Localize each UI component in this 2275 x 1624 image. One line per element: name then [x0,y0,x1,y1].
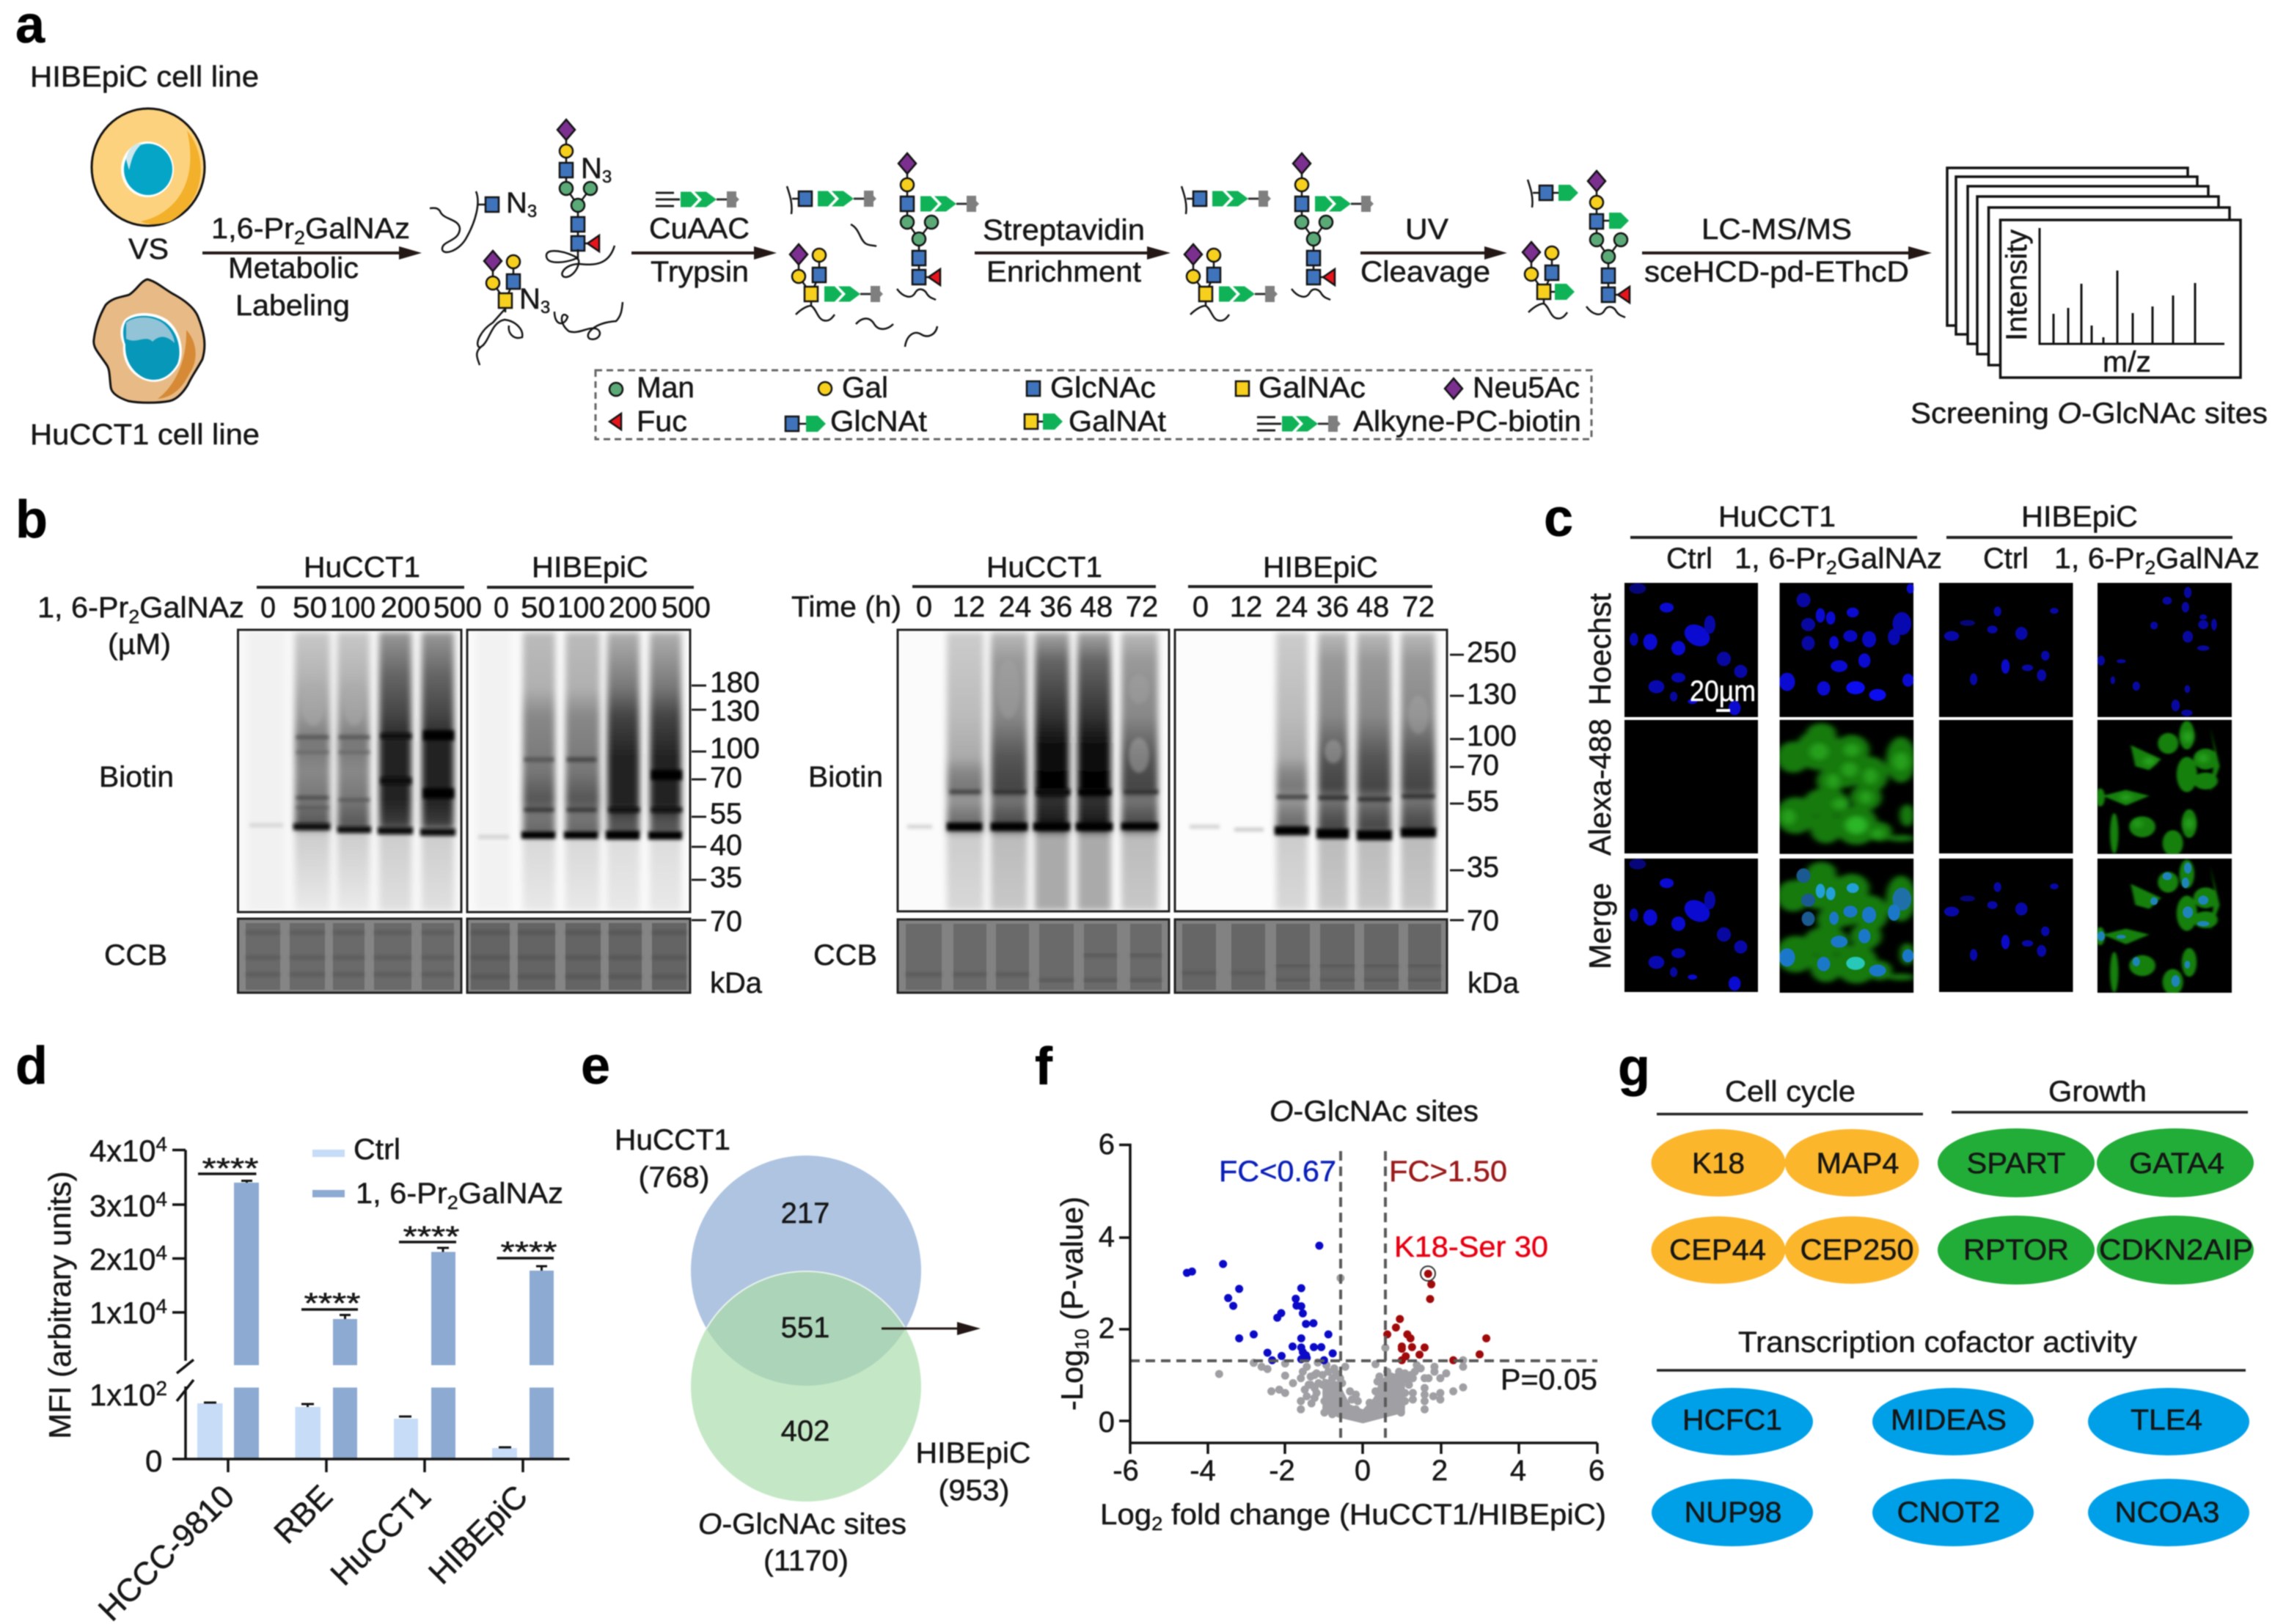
blot: HIBEpiC time biotin [1175,630,1447,911]
dose series header: HuCCT1 [304,551,420,584]
x tick labels: -6 [1113,1455,1139,1487]
molecular weight markers, time: 250 [1467,636,1517,669]
x tick labels: -2 [1269,1455,1295,1487]
labeled proteins with azide glycans: 3 [541,298,550,317]
label: VS: VS [128,233,169,265]
legend: glycan symbols: Neu5Ac [1473,372,1580,404]
panel g: protein categories [1618,1038,2254,1546]
significance brackets [198,1153,557,1320]
blot: HIBEpiC dose CCB [467,919,690,993]
icon: HuCCT1 cell [94,279,205,403]
dose series header: 50 [521,592,555,624]
y tick labels: 2 [1099,1312,1115,1345]
significance brackets: **** [403,1221,459,1253]
time series header [791,551,1435,623]
molecular weight markers, time: 55 [1467,785,1499,817]
y axis tick labels [89,1133,167,1478]
label: Streptavidin: Streptavidin [983,214,1145,246]
label: HuCCT1 cell line: HuCCT1 cell line [30,419,260,451]
legend: glycan symbols: Fuc [637,405,687,438]
scale bar: 20 µm: 20µm [1690,675,1756,708]
time series header: 48 [1357,591,1389,623]
row labels: Hoechst [1583,593,1617,705]
labeled proteins with azide glycans: 3 [527,202,537,221]
group: growth: RPTOR [1963,1234,2069,1266]
time series header: HuCCT1 [986,551,1102,584]
y axis tick labels: 3x10 [89,1188,156,1223]
y axis tick labels: 4x10 [89,1134,156,1168]
time series header: 0 [916,591,932,623]
highlighted point: K18-Ser 30 [1421,1266,1435,1281]
dose series header [37,551,711,661]
molecular weight markers, dose: 55 [710,798,742,830]
blot: HuCCT1 dose CCB [238,919,461,993]
group: transcription cofactor activity: Transcription cofactor activity [1738,1326,2137,1359]
time series header: 72 [1402,591,1435,623]
label: 1,6-Pr2GalNAz: 2 [294,227,305,249]
annotation: P=0.05: P=0.05 [1501,1364,1597,1396]
time series header: 0 [1193,591,1209,623]
group: transcription cofactor activity: TLE4 [2131,1404,2202,1436]
dose series header: 200 [381,592,431,624]
x axis labels: HIBEpiC [422,1478,535,1591]
dose series header: (µM) [108,628,171,661]
legend: glycan symbols: Gal [842,372,888,404]
group: cell cycle: K18 [1692,1147,1745,1180]
x axis labels [92,1478,535,1624]
arrow: UV cleavage [1360,246,1507,260]
molecular weight markers, dose: 35 [710,861,742,894]
group: cell cycle: CEP44 [1669,1234,1766,1266]
labeled proteins with azide glycans: 3 [602,167,612,187]
label: Screening O-GlcNAc sites: Screening O-GlcNAc sites [1911,397,2268,430]
legend: 2 [447,1191,458,1213]
arrow: metabolic labeling [202,246,422,260]
time series header: 48 [1080,591,1113,623]
molecular weight markers, time: 70 [1467,749,1499,782]
glycopeptides after CuAAC [787,153,979,347]
y tick labels [1099,1128,1115,1439]
x tick labels: 0 [1355,1455,1371,1487]
label: HuCCT1 (768) [615,1124,730,1194]
blot: HIBEpiC dose biotin [467,630,690,912]
dose series header: 0 [494,592,509,624]
group: transcription cofactor activity: NUP98 [1684,1496,1782,1529]
label: HIBEpiC (953): HIBEpiC [915,1437,1031,1469]
label: Labeling: Labeling [235,290,350,322]
label: HIBEpiC (953): (953) [939,1474,1009,1507]
dose series header: 50 [293,592,327,624]
dose series header: 2 [128,606,139,628]
venn circles [691,1155,921,1502]
molecular weight markers, time: kDa [1468,967,1520,999]
label: Metabolic: Metabolic [228,252,359,284]
panel c: fluorescence microscopy [1544,489,2260,995]
annotation: FC<0.67: FC<0.67 [1219,1155,1336,1188]
panel b: western blots [15,490,1520,999]
x axis labels: HuCCT1 [323,1478,438,1592]
y axis tick labels: 1x10 [89,1378,156,1412]
legend: 1, 6-Pr [356,1177,444,1210]
x axis title: Log [1100,1499,1149,1531]
molecular weight markers, time: 70 [1467,905,1499,937]
icon: alkyne-PC-biotin reagent [656,191,739,207]
annotation: K18-Ser 30: K18-Ser 30 [1394,1231,1548,1263]
column headers: HIBEpiC [2021,501,2138,533]
dose series header: 100 [330,592,375,624]
axes [172,1150,569,1472]
time series header: HIBEpiC [1263,551,1378,584]
significance brackets: **** [304,1287,361,1320]
y axis tick labels: 4 [156,1188,167,1210]
y axis title: 10 [1071,1329,1093,1350]
time series header: Time (h) [791,591,901,623]
y axis tick labels: 4 [156,1133,167,1155]
column headers: 1, 6-Pr [2054,543,2142,575]
panel f: volcano plot [1035,1037,1606,1535]
y axis title: -Log [1055,1349,1089,1411]
dose series header: 0 [260,592,276,624]
group: growth: Growth [2048,1076,2147,1108]
label: 1,6-Pr2GalNAz: 1,6-Pr [211,213,291,245]
column headers: 2 [2144,556,2155,578]
dose series header: GalNAz [139,592,244,624]
legend: glycan symbols: GlcNAt [830,405,927,438]
label: Trypsin: Trypsin [651,256,749,288]
dose series header: HIBEpiC [532,551,648,584]
molecular weight markers, time [1450,636,1520,999]
group: growth: SPART [1967,1147,2065,1180]
molecular weight markers, time: 35 [1467,851,1499,883]
panel letter b: b [15,490,48,549]
y axis tick labels: 0 [145,1444,162,1478]
threshold lines [1130,1151,1597,1443]
arrow: LC-MS/MS [1642,246,1932,260]
molecular weight markers, dose [692,666,763,999]
label: CCB: CCB [813,939,877,971]
label: Enrichment: Enrichment [986,256,1141,288]
label: O-GlcNAc sites (1170) [698,1508,906,1577]
blot: HIBEpiC time CCB [1175,919,1447,993]
group: cell cycle: Cell cycle [1725,1076,1855,1108]
panel letter e: e [581,1037,610,1095]
panel d: MFI bar chart [15,1037,569,1624]
microscopy image grid [1624,583,2232,995]
dose series header: 200 [609,592,657,624]
dose series header: 100 [557,592,605,624]
time series header: 24 [999,591,1031,623]
blot: HuCCT1 time biotin [898,630,1169,911]
y tick labels: 6 [1099,1128,1115,1161]
molecular weight markers, time: 100 [1467,720,1517,752]
arrow: streptavidin enrichment [975,246,1171,260]
value: 402: 402 [781,1415,829,1447]
group: cell cycle: CEP250 [1800,1234,1914,1266]
legend: glycan symbols: GalNAt [1069,405,1166,438]
time series header: 72 [1126,591,1158,623]
labeled proteins with azide glycans: N [519,283,541,315]
label: 1,6-Pr2GalNAz: GalNAz [305,213,410,245]
enriched glycopeptides [1182,153,1374,320]
y axis tick labels: 2 [156,1377,167,1400]
molecular weight markers, dose: 70 [710,905,742,938]
panel e: Venn diagram [581,1037,1031,1577]
x axis title: fold change (HuCCT1/HIBEpiC) [1162,1499,1606,1531]
panel letter g: g [1618,1038,1650,1097]
significance brackets: **** [500,1236,557,1268]
molecular weight markers, dose: 180 [710,666,760,699]
significance brackets: **** [202,1153,258,1185]
legend: Ctrl [353,1134,400,1166]
group: cell cycle: MAP4 [1816,1147,1900,1180]
stacked MS spectra [1947,168,2241,378]
plot title: O-GlcNAc sites [1270,1095,1479,1128]
value: 217: 217 [781,1197,829,1230]
time series header: 24 [1275,591,1308,623]
label: Biotin: Biotin [808,761,883,793]
label: HIBEpiC cell line: HIBEpiC cell line [30,61,259,93]
value: 551: 551 [781,1312,829,1344]
y axis title: (P-value) [1055,1197,1089,1329]
molecular weight markers, dose: 40 [710,829,742,861]
row labels: Alexa-488 [1583,719,1617,856]
molecular weight markers, dose: 70 [710,762,742,794]
legend [312,1134,563,1213]
legend: glycan symbols: Alkyne-PC-biotin [1353,405,1581,438]
panel letter f: f [1035,1037,1053,1096]
arrow to volcano plot [882,1322,981,1335]
group: transcription cofactor activity: CNOT2 [1897,1496,2001,1529]
data points [1187,1246,1487,1423]
legend: glycan symbols: Man [637,372,695,404]
time series header: 36 [1040,591,1072,623]
axes and ticks [1119,1145,1597,1454]
time series header: 12 [1230,591,1262,623]
x axis labels: HCCC-9810 [92,1478,241,1624]
panel a: labeling workflow [15,0,2268,451]
cleaved glycopeptides [1523,171,1630,318]
icon: HIBEpiC cell [92,109,205,226]
group: transcription cofactor activity [1652,1326,2249,1546]
bars and error bars [197,1180,554,1458]
annotation: FC>1.50: FC>1.50 [1389,1155,1507,1188]
labeled proteins with azide glycans [430,120,623,365]
x tick labels: 6 [1589,1455,1605,1487]
row labels [1583,593,1617,969]
label: Biotin: Biotin [99,761,174,793]
column headers [1630,501,2260,578]
group: growth: CDKN2AIP [2099,1234,2253,1266]
label: HIBEpiC (953) [915,1437,1031,1507]
panel letter d: d [15,1037,48,1095]
y axis tick labels: 4 [156,1295,167,1318]
y axis tick labels: 4 [156,1241,167,1264]
label: HuCCT1 (768): (768) [638,1161,710,1194]
dose series header: 500 [433,592,482,624]
dose series header: 500 [662,592,711,624]
label: m/z: m/z [2103,346,2151,378]
label: Intensity: Intensity [2001,229,2033,341]
arrow: CuAAC [631,246,777,260]
group: transcription cofactor activity: HCFC1 [1682,1404,1782,1436]
x tick labels: -4 [1190,1455,1216,1487]
blot: HuCCT1 time CCB [898,919,1169,993]
column headers: Ctrl [1983,543,2029,575]
labeled proteins with azide glycans: N [581,153,602,185]
label: CuAAC: CuAAC [649,213,750,245]
y axis tick labels: 1x10 [89,1296,156,1330]
panel letter c: c [1544,489,1573,548]
column headers: HuCCT1 [1718,501,1836,533]
labeled proteins with azide glycans: N [506,187,527,219]
y axis tick labels: 2x10 [89,1242,156,1276]
group: cell cycle [1652,1076,1923,1284]
label: sceHCD-pd-EThcD: sceHCD-pd-EThcD [1644,256,1909,288]
label: CCB: CCB [104,939,167,971]
blot: HuCCT1 dose biotin [238,630,461,912]
label: UV: UV [1405,213,1448,246]
x tick labels: 4 [1510,1455,1526,1487]
label: O-GlcNAc sites (1170): O-GlcNAc sites [698,1508,906,1540]
legend: glycan symbols [596,370,1591,439]
legend: glycan symbols: GlcNAc [1050,372,1156,404]
label: Cleavage: Cleavage [1360,256,1490,288]
time series header: 36 [1316,591,1349,623]
column headers: 2 [1826,556,1837,578]
molecular weight markers, time: 130 [1467,678,1517,710]
group: growth [1938,1076,2254,1285]
column headers: GalNAz [1837,543,1942,575]
dose series header: 1, 6-Pr [37,592,125,624]
group: transcription cofactor activity: NCOA3 [2115,1496,2219,1529]
molecular weight markers, dose: 100 [710,732,760,765]
label: LC-MS/MS: LC-MS/MS [1701,213,1852,246]
column headers: Ctrl [1666,543,1712,575]
x tick labels [1113,1455,1605,1487]
column headers: 1, 6-Pr [1734,543,1822,575]
time series header: 12 [953,591,985,623]
label: O-GlcNAc sites (1170): (1170) [763,1545,849,1577]
y tick labels: 0 [1099,1406,1115,1439]
x tick labels: 2 [1432,1455,1448,1487]
legend: glycan symbols: GalNAc [1259,372,1366,404]
group: transcription cofactor activity: MIDEAS [1891,1404,2007,1436]
x axis title: 2 [1151,1513,1162,1535]
y axis title: MFI (arbitrary units) [43,1172,77,1439]
row labels: Merge [1583,883,1617,969]
group: growth: GATA4 [2129,1147,2224,1180]
molecular weight markers, dose: 130 [710,695,760,727]
label: HuCCT1 (768): HuCCT1 [615,1124,730,1156]
x axis labels: RBE [267,1478,340,1551]
legend: GalNAz [458,1177,563,1210]
column headers: GalNAz [2155,543,2260,575]
y tick labels: 4 [1099,1221,1115,1253]
molecular weight markers, dose: kDa [710,967,763,999]
